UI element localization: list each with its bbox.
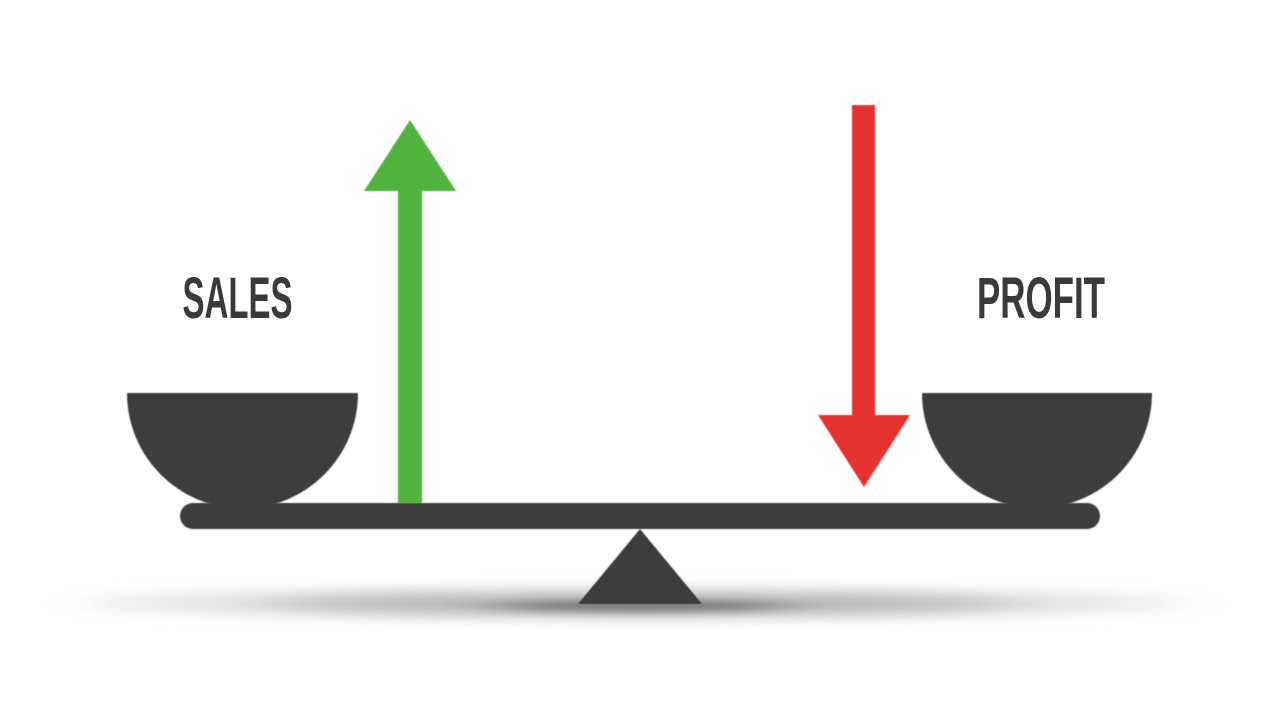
left bowl	[127, 393, 358, 508]
balance beam	[180, 503, 1100, 529]
icon: green up arrow	[364, 120, 456, 503]
fulcrum	[578, 529, 702, 604]
label: profit: PROFIT	[977, 266, 1105, 331]
label: sales: SALES	[182, 266, 292, 331]
right bowl	[922, 393, 1152, 508]
icon: red down arrow	[818, 105, 910, 487]
ground shadow	[85, 590, 1185, 616]
